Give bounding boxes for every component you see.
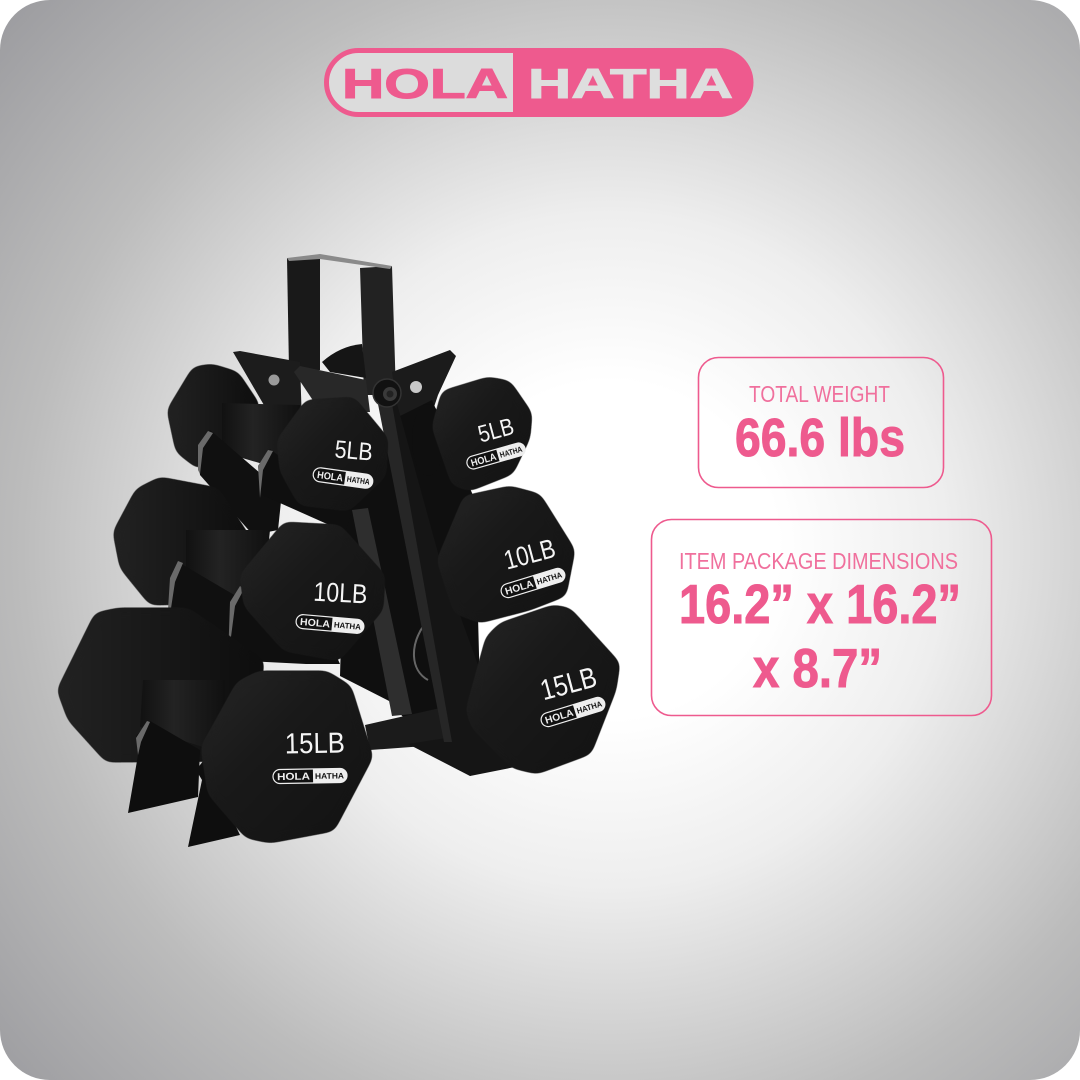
mini logo: right 10LB: HOLA — [504, 579, 535, 598]
right rack fin — [392, 350, 456, 425]
rear dark rack mass — [340, 400, 482, 776]
left rack fin — [233, 351, 302, 425]
centre plate — [294, 366, 370, 412]
mini logo: front 15LB — [273, 768, 347, 784]
weight label: front 15LB: 15LB — [285, 727, 345, 761]
bolt — [373, 379, 401, 407]
front 5LB dumbbell head — [277, 397, 388, 511]
dimensions label: ITEM PACKAGE DIMENSIONS — [679, 548, 958, 574]
weight label: front 10LB: 10LB — [313, 577, 368, 609]
10LB handle — [186, 530, 270, 610]
mini logo: right 15LB: HATHA — [576, 699, 603, 716]
right 5LB dumbbell head — [432, 377, 532, 491]
dimensions value line 1: 16.2” x 16.2” — [679, 573, 961, 635]
logo: HolaHatha — [326, 48, 754, 117]
5LB tab plates — [198, 430, 352, 535]
15LB feet — [128, 721, 240, 847]
mini logo: front 10LB: HATHA — [334, 620, 361, 632]
10LB tab plates — [167, 561, 340, 692]
weight label: right 10LB: 10LB — [501, 533, 559, 576]
back 10LB dumbbell head — [113, 477, 252, 605]
back 5LB dumbbell head — [167, 364, 260, 469]
mini logo: front 15LB: HATHA — [315, 771, 344, 781]
mini logo: right 15LB: HOLA — [544, 708, 575, 727]
back 15LB dumbbell head — [57, 608, 264, 762]
mini logo: right 10LB — [499, 567, 567, 599]
mini logo: right 10LB: HATHA — [536, 570, 563, 587]
mini logo: front 5LB: HOLA — [316, 470, 344, 484]
rear upper plate — [322, 344, 366, 378]
mini logo: right 5LB: HOLA — [470, 452, 498, 469]
right 15LB dumbbell head — [466, 605, 620, 774]
logo: HolaHatha: HOLA — [342, 60, 508, 107]
weight label: right 5LB: 5LB — [475, 413, 517, 448]
dumbbell rack product photo — [57, 254, 620, 847]
mini logo: front 10LB — [296, 614, 364, 634]
mini logo: front 5LB: HATHA — [346, 475, 370, 487]
weight label: front 5LB: 5LB — [334, 435, 374, 467]
15LB handle — [140, 680, 225, 754]
main leg — [378, 400, 515, 776]
5LB handle — [222, 403, 300, 475]
right 5LB back cap — [412, 404, 444, 476]
gray back leg — [352, 508, 412, 716]
mini logo: front 15LB: HOLA — [277, 772, 310, 783]
front 10LB dumbbell head — [240, 522, 385, 661]
panel: total weight — [698, 358, 944, 488]
total weight label: TOTAL WEIGHT — [749, 381, 890, 407]
dimensions value line 2: x 8.7” — [753, 637, 882, 699]
logo: HolaHatha: HATHA — [528, 60, 733, 107]
mini logo: right 15LB — [539, 696, 607, 728]
mini logo: front 5LB — [312, 467, 374, 489]
rack handle — [287, 254, 396, 395]
rack crossbar — [365, 708, 452, 750]
total weight value: 66.6 lbs — [735, 408, 905, 468]
panel: item package dimensions — [652, 520, 992, 716]
rack wire loop — [414, 625, 428, 680]
right 10LB dumbbell head — [437, 486, 575, 623]
mini logo: right 5LB: HATHA — [499, 445, 524, 460]
mini logo: right 5LB — [465, 441, 527, 471]
mini logo: front 10LB: HOLA — [300, 617, 330, 630]
fin hole — [410, 381, 422, 393]
weight label: right 15LB: 15LB — [537, 661, 600, 707]
front 15LB dumbbell head — [201, 671, 373, 843]
